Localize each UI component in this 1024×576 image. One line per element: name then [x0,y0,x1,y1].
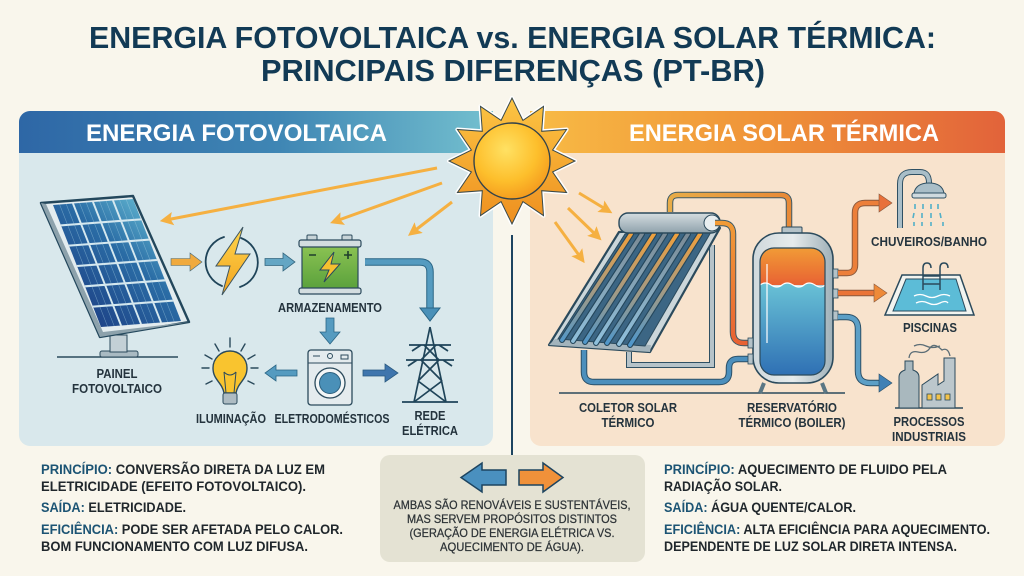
label: processos industriais: PROCESSOS [894,415,964,429]
pipe: hot return [715,223,750,343]
text: summary: AQUECIMENTO DE ÁGUA). [440,539,584,554]
label: processos industriais [892,415,966,444]
text block: fotovoltaica details: EFICIÊNCIA: PODE SER AFETADA PELO CALOR. [41,522,343,537]
label: piscinas: PISCINAS [903,321,957,335]
arrows: sun rays right [555,193,607,258]
heading: energia fotovoltaica: ENERGIA FOTOVOLTAICA [86,120,387,147]
icon: light bulb [202,338,258,404]
ground line [559,392,845,394]
arrow: battery to grid [365,262,440,321]
arrow: appliances to grid [363,364,398,382]
text block: termica details: SAÍDA: ÁGUA QUENTE/CALOR. [664,500,856,515]
icon: washing machine [308,350,352,405]
text: summary: (GERAÇÃO DE ENERGIA ELÉTRICA VS. [410,525,614,540]
title: ENERGIA FOTOVOLTAICA vs. ENERGIA SOLAR TÉRMICA: [89,20,936,55]
text: summary: MAS SERVEM PROPÓSITOS DISTINTOS [407,511,617,526]
title [89,20,936,88]
text block: fotovoltaica details: BOM FUNCIONAMENTO COM LUZ DIFUSA. [41,539,308,554]
label: rede eletrica [402,409,458,438]
icon: lightning [206,227,258,295]
text block: fotovoltaica details [41,462,343,554]
text: summary: AMBAS SÃO RENOVÁVEIS E SUSTENTÁVEIS, [394,497,630,512]
text block: termica details: RADIAÇÃO SOLAR. [664,479,782,494]
label: painel fotovoltaico: FOTOVOLTAICO [72,382,162,396]
text block: termica details: DEPENDENTE DE LUZ SOLAR DIRETA INTENSA. [664,539,957,554]
label: rede eletrica: REDE [414,409,446,423]
text block: fotovoltaica details: PRINCÍPIO: CONVERSÃO DIRETA DA LUZ EM [41,462,325,477]
label: coletor solar termico: COLETOR SOLAR [579,401,677,415]
icon: right arrow [519,463,563,492]
label: reservatorio termico: RESERVATÓRIO [747,400,837,415]
arrow: appliances to lighting [265,365,297,381]
label: coletor solar termico: TÉRMICO [602,415,655,430]
text block: fotovoltaica details: ELETRICIDADE (EFEITO FOTOVOLTAICO). [41,479,306,494]
text block: termica details: EFICIÊNCIA: ALTA EFICIÊNCIA PARA AQUECIMENTO. [664,522,990,537]
icon: transmission tower [402,327,458,402]
text: summary [394,497,630,554]
arrow: hot water to shower [838,194,892,273]
pipe: collector top to boiler [670,195,789,228]
label: iluminacao: ILUMINAÇÃO [196,411,266,426]
label: reservatorio termico [738,400,846,430]
icon: left arrow [461,463,506,492]
text block: termica details [664,462,990,554]
arrow: hot water to pool [838,284,887,302]
arrows: sun rays left [166,168,452,232]
label: chuveiros/banho: CHUVEIROS/BANHO [871,235,987,249]
label: painel fotovoltaico: PAINEL [96,367,138,381]
pipe: cold supply [584,350,750,382]
panel header: solar termica [530,111,1005,153]
arrow: battery to appliances [320,318,340,344]
label: reservatorio termico: TÉRMICO (BOILER) [738,415,846,430]
icon: solar panel [41,196,189,357]
arrow: panel to inverter [171,253,202,271]
arrow: inverter to battery [265,253,295,271]
center divider [511,235,513,455]
icon: solar thermal collector [549,213,720,365]
label: rede eletrica: ELÉTRICA [402,423,458,438]
icon: boiler tank [748,227,838,393]
arrow: water to industry [838,317,892,392]
panel header: fotovoltaica [19,111,493,153]
label: armazenamento: ARMAZENAMENTO [278,301,382,315]
icon: sun [449,98,575,224]
icon: pool [885,263,974,315]
label: coletor solar termico [579,401,677,430]
panel: energia fotovoltaica [19,111,493,446]
text block: termica details: PRINCÍPIO: AQUECIMENTO DE FLUIDO PELA [664,462,947,477]
label: eletrodomesticos: ELETRODOMÉSTICOS [274,411,390,426]
label: painel fotovoltaico [72,367,162,396]
icon: factory [895,344,963,408]
panel: summary [380,455,645,562]
text block: fotovoltaica details: SAÍDA: ELETRICIDADE. [41,500,186,515]
title: PRINCIPAIS DIFERENÇAS (PT-BR) [261,53,765,88]
icon: shower [900,172,946,228]
label: processos industriais: INDUSTRIAIS [892,430,966,444]
panel: energia solar termica [530,111,1005,446]
heading: energia solar termica: ENERGIA SOLAR TÉRMICA [629,119,939,147]
icon: battery [299,235,361,294]
